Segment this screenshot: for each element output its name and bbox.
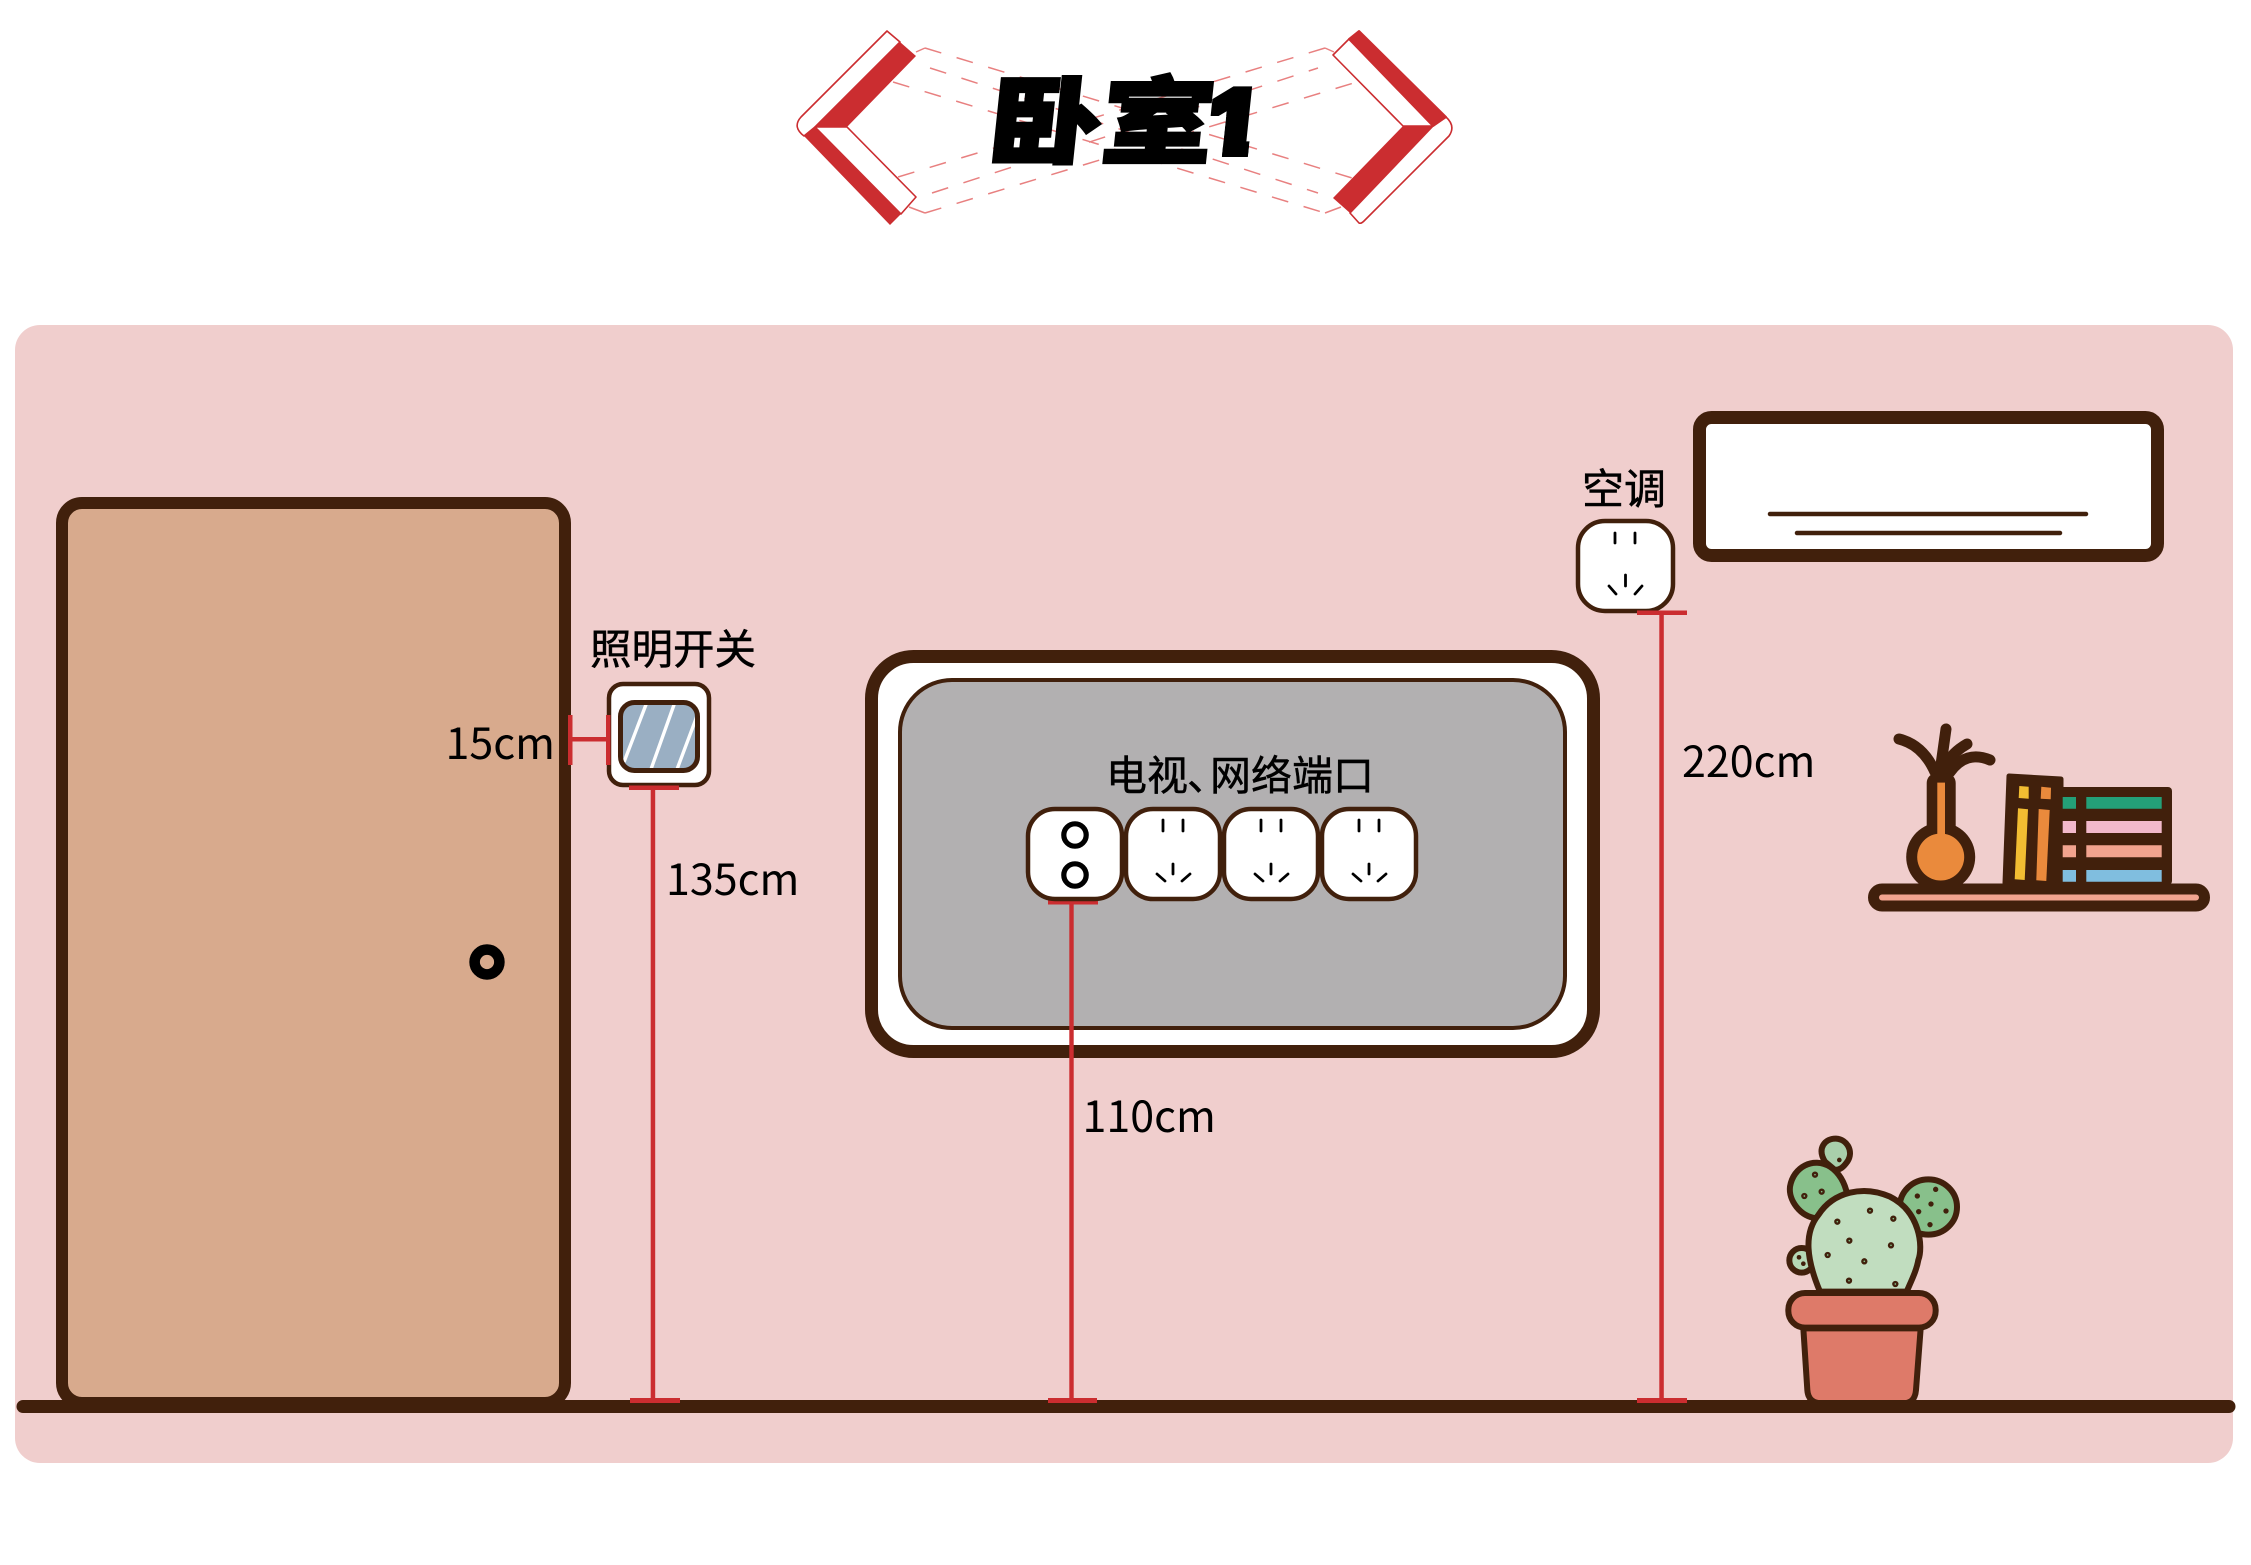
- vase: [1906, 773, 1975, 892]
- cactus spines: [1802, 1173, 1897, 1286]
- title text: [992, 72, 1252, 166]
- power socket 1: [1126, 809, 1220, 899]
- TV and network ports: [1028, 742, 1416, 899]
- dimension: 110cm: [1048, 900, 1216, 1403]
- switch rocker: [620, 702, 700, 772]
- shelf board: [1874, 889, 2204, 906]
- dimension: 135cm: [629, 786, 799, 1403]
- socket label: 空调: [1582, 456, 1666, 517]
- TV frame: [872, 656, 1594, 1052]
- dimension: 110cm: 110cm: [1082, 1083, 1216, 1145]
- air conditioner socket: [1578, 456, 1673, 611]
- dashed decorative rays: [893, 48, 1357, 213]
- door knob: [475, 950, 499, 974]
- panel: wall background: [15, 325, 2233, 1463]
- door: [62, 503, 565, 1403]
- power socket 2: [1224, 809, 1318, 899]
- title text: 1: [1203, 71, 1266, 176]
- potted cactus: [1788, 1139, 1957, 1403]
- shelf with vase and books: [1874, 729, 2204, 906]
- right chevron: [1333, 31, 1452, 223]
- socket body: [1578, 521, 1673, 611]
- power socket 3: [1322, 809, 1416, 899]
- switch label: 照明开关: [590, 616, 756, 676]
- TV unit: [872, 656, 1594, 1052]
- cactus pads: [1789, 1139, 1957, 1292]
- dimension: 220cm: 220cm: [1682, 728, 1815, 790]
- upright books: [2005, 776, 2061, 883]
- stacked books: [2055, 787, 2172, 885]
- ports label: 电视、网络端口: [1106, 742, 1374, 802]
- port: TV/network: [1028, 809, 1122, 899]
- dimension: 15cm from door: 15cm: [446, 710, 555, 772]
- floor line: [23, 1400, 2229, 1413]
- TV screen: [900, 680, 1565, 1028]
- title text: 卧室: [984, 47, 1222, 183]
- dimension: 15cm from door: [446, 710, 610, 772]
- title banner: [797, 31, 1452, 225]
- air conditioner: [1700, 418, 2158, 556]
- door leaf: [62, 503, 565, 1403]
- dimension: 135cm: 135cm: [666, 846, 799, 908]
- switch plate: [609, 684, 709, 785]
- dimension: 220cm: [1637, 610, 1815, 1403]
- flower pot: [1788, 1293, 1936, 1403]
- left chevron: [797, 31, 916, 225]
- light switch: [590, 616, 756, 785]
- socket pins: [1609, 533, 1642, 594]
- vase branches: [1899, 729, 1990, 772]
